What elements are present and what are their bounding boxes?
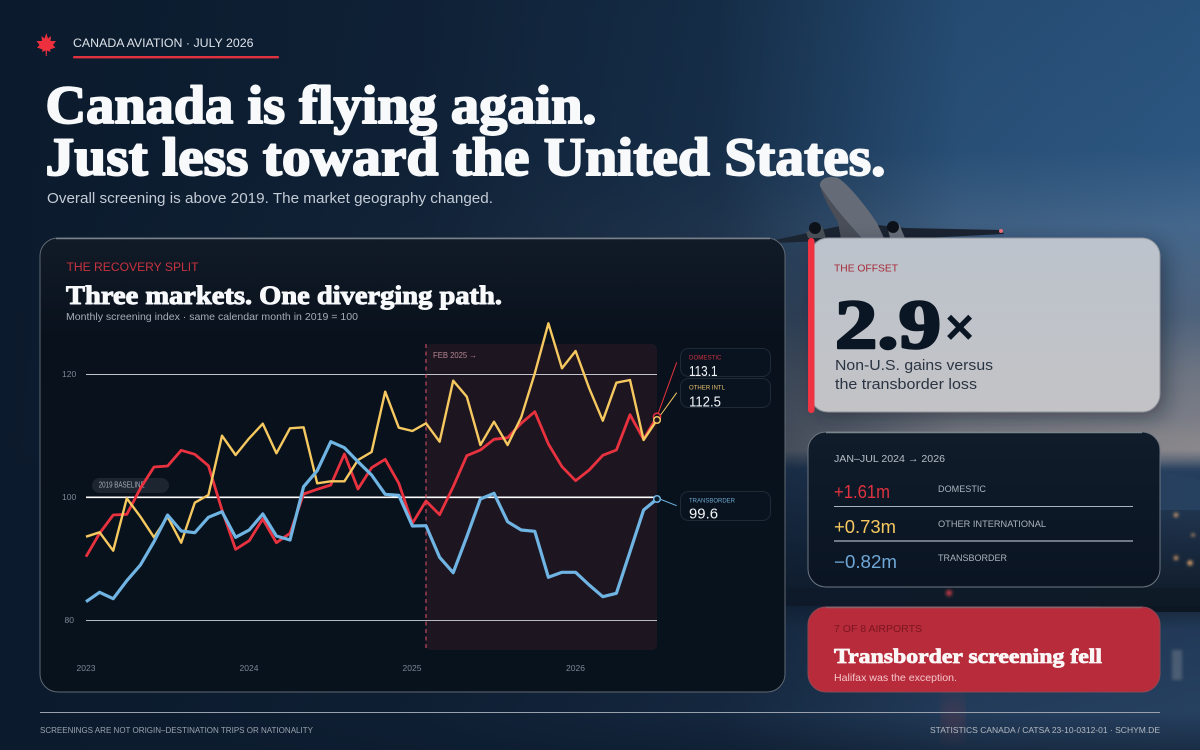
2019 baseline pill: 2019 BASELINE (99, 480, 145, 490)
subtitle: Overall screening is above 2019. The market geography changed. (47, 190, 493, 207)
series: transborder (86, 442, 657, 602)
footer note: SCREENINGS ARE NOT ORIGIN–DESTINATION TRIPS OR NATIONALITY (40, 726, 314, 735)
end label: domestic (680, 348, 770, 380)
red accent bar (808, 238, 814, 413)
baseline at 100 (86, 496, 657, 498)
panel: Jan–Jul change (808, 432, 1160, 587)
panel: the offset (808, 238, 1165, 417)
callout heading: Transborder screening fell (834, 644, 1102, 668)
series: domestic (86, 412, 657, 557)
end label: domestic: 113.1 (689, 364, 718, 380)
panel subheading: Monthly screening index · same calendar month in 2019 = 100 (66, 311, 358, 323)
Feb 2025 marker: FEB 2025 → (433, 350, 477, 360)
x axis labels: 2026 (566, 663, 585, 673)
end label: transborder: TRANSBORDER (689, 498, 735, 504)
x axis labels: 2023 (77, 663, 96, 673)
series: other international (86, 323, 657, 551)
big number: × (945, 299, 974, 355)
row: other international: +0.73m (834, 517, 896, 537)
y axis labels: 100 (62, 492, 76, 502)
footer (40, 712, 1160, 735)
x axis labels (77, 663, 585, 673)
panel heading: Three markets. One diverging path. (66, 281, 502, 310)
big number (835, 287, 974, 364)
row: transborder: −0.82m (834, 552, 897, 572)
x axis labels: 2024 (240, 663, 259, 673)
end label: transborder: 99.6 (689, 507, 718, 523)
kicker underline (73, 56, 279, 58)
row: domestic: DOMESTIC (938, 484, 986, 494)
2019 baseline pill (92, 478, 169, 493)
end label: domestic: DOMESTIC (689, 354, 722, 362)
description: Non-U.S. gains versus (835, 358, 993, 374)
big number: 2.9 (835, 287, 941, 364)
end label: other international: OTHER INTL (689, 384, 725, 392)
callout note: Halifax was the exception. (834, 672, 957, 684)
footer source: STATISTICS CANADA / CATSA 23-10-0312-01 · SCHYM.DE (930, 726, 1160, 735)
shaded period since Feb 2025 (426, 344, 657, 650)
end markers and connectors (653, 362, 677, 506)
row: transborder: TRANSBORDER (938, 553, 1007, 563)
panel: recovery split chart (40, 238, 785, 692)
panel eyebrow: THE RECOVERY SPLIT (66, 262, 198, 274)
y axis labels: 120 (62, 369, 76, 379)
panel heading: JAN–JUL 2024 → 2026 (834, 453, 945, 465)
row: transborder (834, 552, 1007, 572)
photo element: airplane (775, 177, 1004, 243)
eyebrow: THE OFFSET (834, 263, 899, 275)
end label: other international (680, 378, 770, 410)
panel: 7 of 8 airports (808, 607, 1160, 692)
row: other international (834, 517, 1046, 537)
kicker text: CANADA AVIATION · JULY 2026 (73, 36, 254, 50)
title (46, 75, 885, 187)
row: domestic: +1.61m (834, 482, 890, 502)
row: domestic (834, 482, 986, 502)
eyebrow: 7 OF 8 AIRPORTS (834, 623, 922, 635)
title: Canada is flying again. (46, 75, 596, 135)
row: other international: OTHER INTERNATIONAL (938, 519, 1046, 529)
description: the transborder loss (835, 377, 977, 393)
header: kicker with maple leaf (36, 33, 279, 58)
x axis labels: 2025 (403, 663, 422, 673)
end label: other international: 112.5 (689, 394, 721, 410)
end label: transborder (680, 492, 770, 523)
description (835, 358, 993, 393)
icon: maple leaf (36, 33, 56, 56)
y axis labels (62, 369, 76, 625)
y axis labels: 80 (64, 615, 74, 625)
line chart (62, 323, 770, 673)
title: Just less toward the United States. (46, 127, 885, 187)
